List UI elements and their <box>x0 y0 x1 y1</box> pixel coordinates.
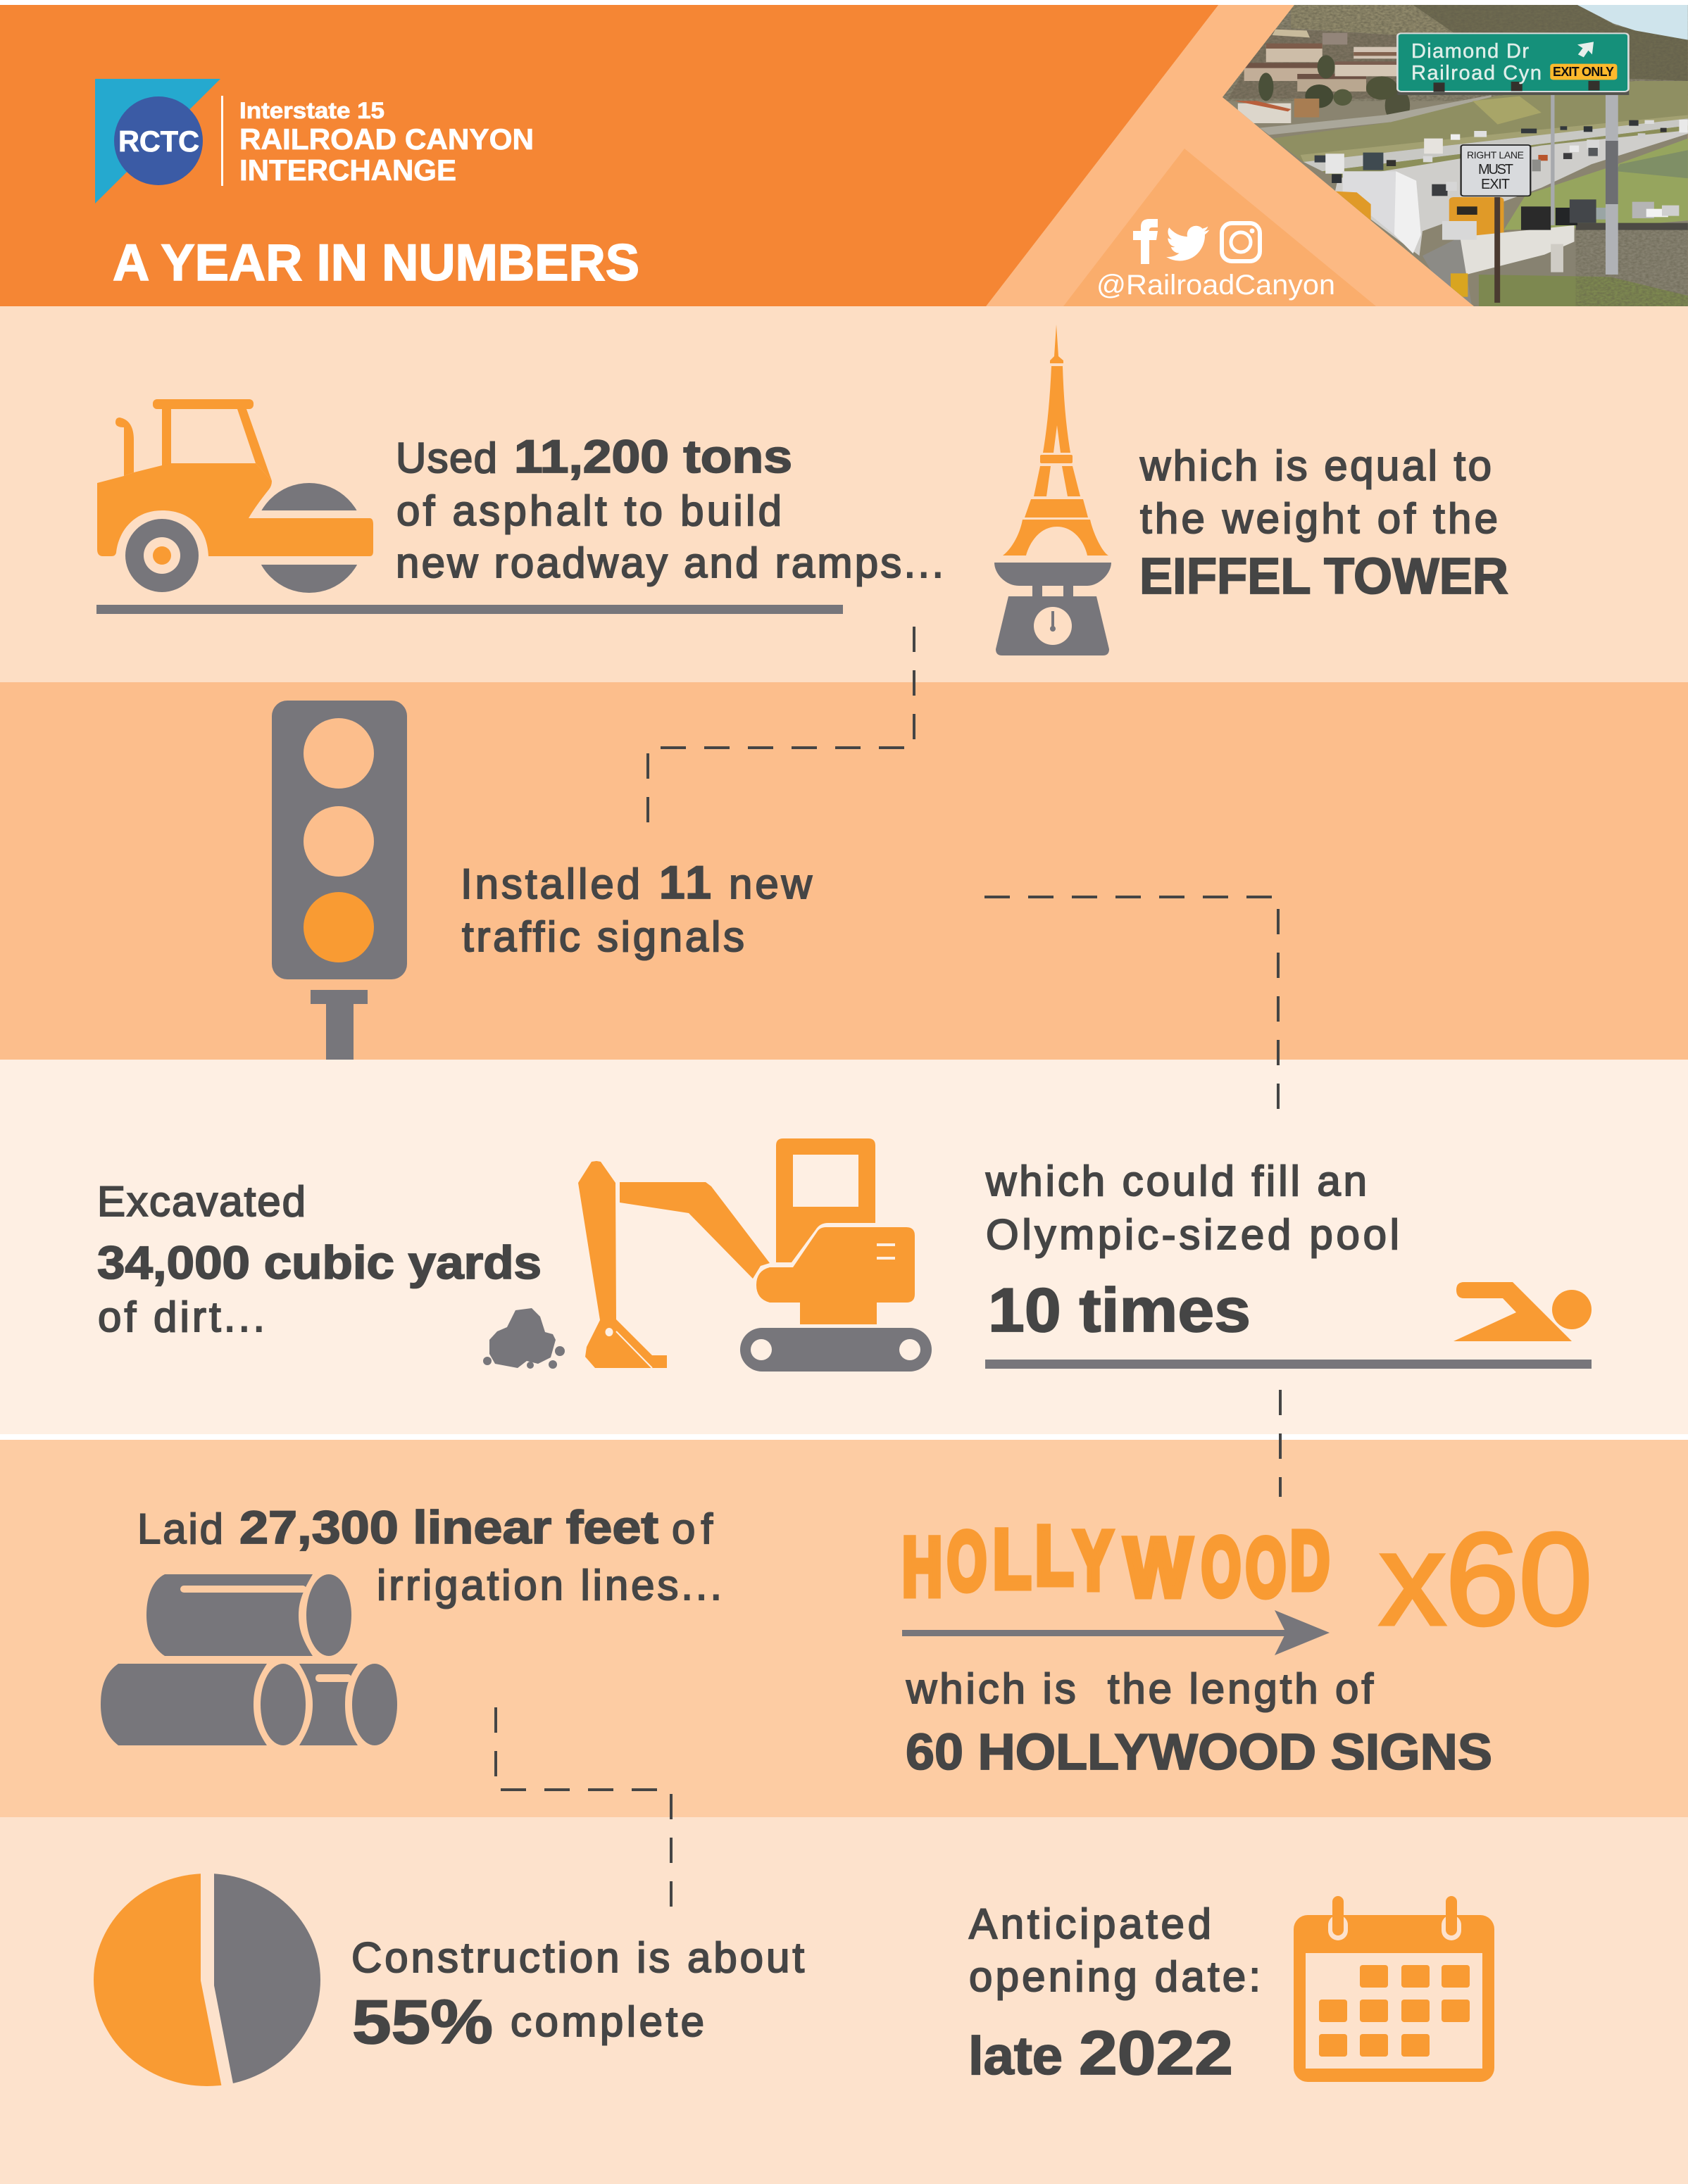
asphalt text <box>396 430 944 586</box>
excavation text: of dirt... <box>98 1293 265 1341</box>
hollywood sign: O <box>1246 1521 1286 1614</box>
hollywood text: which is the length of <box>906 1665 1373 1712</box>
logo teal shape <box>95 79 220 203</box>
hollywood sign: L <box>1035 1510 1073 1602</box>
pool text: 10 times <box>988 1275 1251 1345</box>
opening date text <box>968 1900 1261 2088</box>
hollywood sign: O <box>947 1515 987 1608</box>
sign text <box>1411 40 1614 192</box>
irrigation text: Laid <box>137 1505 223 1552</box>
orange edge cover <box>0 5 1218 306</box>
dashed connector 4 <box>496 1707 671 1908</box>
progress text: complete <box>511 1998 704 2045</box>
signals text <box>461 856 813 960</box>
sign text: Diamond Dr <box>1411 40 1529 63</box>
x60: x60 <box>1380 1507 1592 1652</box>
hollywood sign: O <box>1201 1521 1241 1614</box>
icon: road roller <box>97 399 373 593</box>
excavation text: Excavated <box>97 1178 306 1225</box>
icon: calendar <box>1294 1896 1494 2082</box>
excavation text: 34,000 cubic yards <box>97 1236 542 1288</box>
hollywood text: 60 HOLLYWOOD SIGNS <box>906 1724 1492 1781</box>
opening date text: opening date: <box>969 1953 1261 2000</box>
signals text: new <box>729 860 813 908</box>
logo divider <box>221 96 223 186</box>
peach triangle <box>986 5 1688 306</box>
icon: pipes <box>101 1574 397 1745</box>
excavation text <box>97 1178 542 1341</box>
hollywood sign: H <box>902 1521 942 1614</box>
panel: traffic signals <box>272 701 813 1060</box>
panel: irrigation <box>101 1501 1592 1781</box>
progress text: 55% <box>352 1987 493 2057</box>
project name <box>239 98 534 187</box>
dashed connector 2 <box>984 897 1278 1114</box>
band 2 background <box>0 682 1688 1060</box>
social handle: @RailroadCanyon <box>1096 270 1335 301</box>
sign text: MUST <box>1478 162 1513 177</box>
progress text: Construction is about <box>351 1934 804 1981</box>
signals text: 11 <box>659 856 711 908</box>
arrow <box>902 1610 1330 1655</box>
opening date text: late <box>968 2026 1063 2086</box>
icon: excavator <box>578 1138 932 1372</box>
road line <box>96 605 843 614</box>
sign text: EXIT <box>1481 177 1510 192</box>
signals text: traffic signals <box>462 913 744 960</box>
signals text: Installed <box>461 860 640 908</box>
asphalt text: of asphalt to build <box>396 487 782 534</box>
irrigation text: of <box>672 1505 713 1552</box>
title: A YEAR IN NUMBERS <box>113 234 639 291</box>
icon: instagram <box>1222 223 1260 261</box>
inner triangle <box>1063 149 1376 306</box>
header banner <box>0 0 1688 310</box>
band 3 background <box>0 1060 1688 1434</box>
opening date text: Anticipated <box>969 1900 1211 1947</box>
eiffel text: which is equal to <box>1139 442 1492 489</box>
panel: progress and opening date <box>94 1874 1494 2088</box>
hollywood text <box>906 1665 1492 1781</box>
pool underline <box>985 1360 1592 1369</box>
logo RCTC: RCTC <box>118 125 199 158</box>
irrigation text: 27,300 linear feet <box>239 1501 658 1553</box>
icon: eiffel tower on scale <box>994 325 1111 655</box>
project name: INTERCHANGE <box>239 153 456 187</box>
orange header background <box>0 5 1688 306</box>
pool text <box>985 1157 1399 1345</box>
asphalt text: new roadway and ramps... <box>396 539 944 586</box>
asphalt text: 11,200 tons <box>514 430 792 482</box>
band 1 background <box>0 306 1688 682</box>
icon: swimmer <box>1453 1282 1592 1341</box>
icon: facebook <box>1133 219 1158 264</box>
project name: Interstate 15 <box>239 98 385 123</box>
sign text: RIGHT LANE <box>1467 149 1524 161</box>
hollywood sign: Y <box>1074 1514 1113 1607</box>
pie chart <box>94 1874 320 2086</box>
band 4 background <box>0 1440 1688 1817</box>
asphalt text: Used <box>396 434 497 482</box>
project name: RAILROAD CANYON <box>239 123 534 156</box>
icon: twitter <box>1166 226 1209 261</box>
logo <box>95 79 534 203</box>
highway photo <box>1197 0 1688 310</box>
pool text: which could fill an <box>985 1157 1367 1205</box>
band 5 background <box>0 1817 1688 2184</box>
hollywood sign: W <box>1125 1521 1192 1614</box>
sign text: Railroad Cyn <box>1411 62 1542 84</box>
eiffel text <box>1139 442 1508 605</box>
panel: asphalt <box>96 325 1508 655</box>
panel: excavation <box>97 1138 1592 1372</box>
eiffel text: EIFFEL TOWER <box>1139 548 1508 605</box>
progress text <box>351 1934 804 2057</box>
opening date text: 2022 <box>1079 2018 1233 2088</box>
hollywood sign <box>902 1510 1330 1614</box>
eiffel text: the weight of the <box>1140 495 1498 542</box>
logo blue circle <box>114 96 203 185</box>
hollywood sign: D <box>1290 1514 1330 1607</box>
irrigation text: irrigation lines... <box>377 1562 722 1609</box>
hollywood sign: L <box>993 1513 1031 1606</box>
sign text: EXIT ONLY <box>1553 65 1614 79</box>
icon: dirt pile <box>483 1308 565 1369</box>
social icons <box>1133 219 1260 264</box>
icon: traffic light <box>272 701 407 1060</box>
irrigation text <box>137 1501 722 1609</box>
pool text: Olympic-sized pool <box>986 1211 1399 1258</box>
dashed connector 1 <box>648 627 914 824</box>
dashed connector 3 <box>1279 1390 1282 1497</box>
